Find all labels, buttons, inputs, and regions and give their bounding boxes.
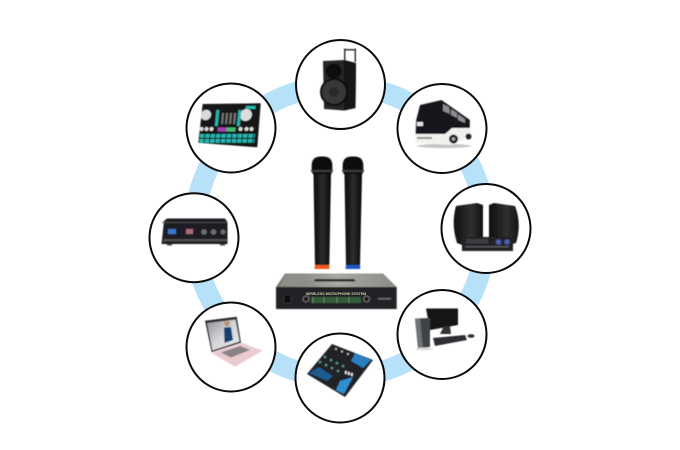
device: double-decker bus: [398, 84, 486, 173]
device: laptop: [186, 302, 276, 392]
receiver label: WIRELESS MICROPHONE SYSTEM: [306, 292, 366, 296]
wireless receiver base unit: [276, 274, 397, 309]
device: portable trolley speaker: [296, 40, 385, 129]
device: live sound card: [186, 84, 276, 172]
handheld microphone with blue ring: [342, 156, 364, 269]
device: stage speakers with amplifier: [442, 184, 530, 273]
device: desktop computer: [398, 290, 486, 379]
device: power amplifier: [150, 193, 238, 282]
handheld microphone with orange ring: [311, 156, 333, 269]
connecting ring: [194, 86, 486, 378]
device: audio mixer: [296, 334, 384, 422]
